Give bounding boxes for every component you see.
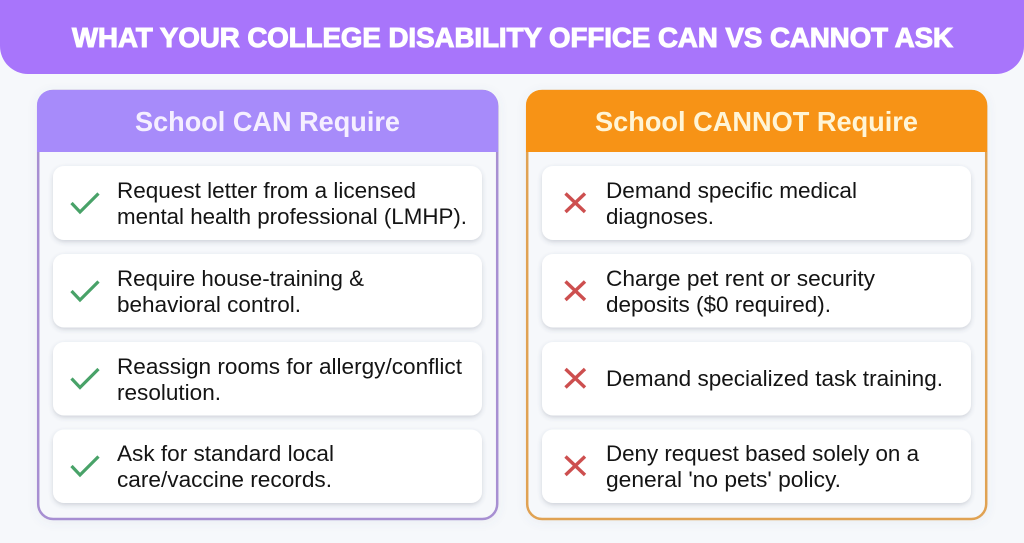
item: task training — [542, 342, 971, 416]
item text: Request letter from a licensed — [117, 178, 416, 203]
panel header: cannot — [526, 90, 987, 152]
icon: cross — [566, 194, 585, 212]
icon: cross — [566, 282, 585, 300]
item text: general 'no pets' policy. — [606, 467, 841, 492]
banner — [0, 0, 1024, 74]
item text: Ask for standard local — [117, 441, 334, 466]
icon: check — [72, 194, 98, 212]
item text: Deny request based solely on a — [606, 441, 919, 466]
panel: school cannot require — [526, 90, 987, 519]
icon: check — [72, 369, 98, 388]
item text: Charge pet rent or security — [606, 266, 876, 291]
panel header: can — [37, 90, 498, 152]
icon: cross — [566, 456, 585, 475]
item: house training — [53, 254, 482, 328]
item text: diagnoses. — [606, 204, 714, 229]
title: WHAT YOUR COLLEGE DISABILITY OFFICE CAN VS CANNOT ASK — [72, 22, 953, 53]
item text: Demand specific medical — [606, 178, 857, 203]
item: no pets policy — [542, 430, 971, 503]
item text: resolution. — [117, 380, 221, 405]
heading: can: School CAN Require — [135, 106, 400, 137]
item: pet rent — [542, 254, 971, 328]
item text: behavioral control. — [117, 292, 301, 317]
item text: care/vaccine records. — [117, 467, 332, 492]
icon: cross — [566, 369, 585, 388]
item: request letter — [53, 166, 482, 240]
item text: deposits ($0 required). — [606, 292, 831, 317]
item: medical diagnoses — [542, 166, 971, 240]
item: reassign rooms — [53, 342, 482, 416]
icon: check — [72, 282, 98, 300]
icon: check — [72, 456, 98, 475]
item text: Require house-training & — [117, 266, 364, 291]
heading: cannot: School CANNOT Require — [595, 106, 918, 137]
item: vaccine records — [53, 430, 482, 503]
item text: Reassign rooms for allergy/conflict — [117, 354, 463, 379]
item text: mental health professional (LMHP). — [117, 204, 467, 229]
item text: Demand specialized task training. — [606, 366, 943, 391]
panel: school can require — [37, 90, 498, 519]
